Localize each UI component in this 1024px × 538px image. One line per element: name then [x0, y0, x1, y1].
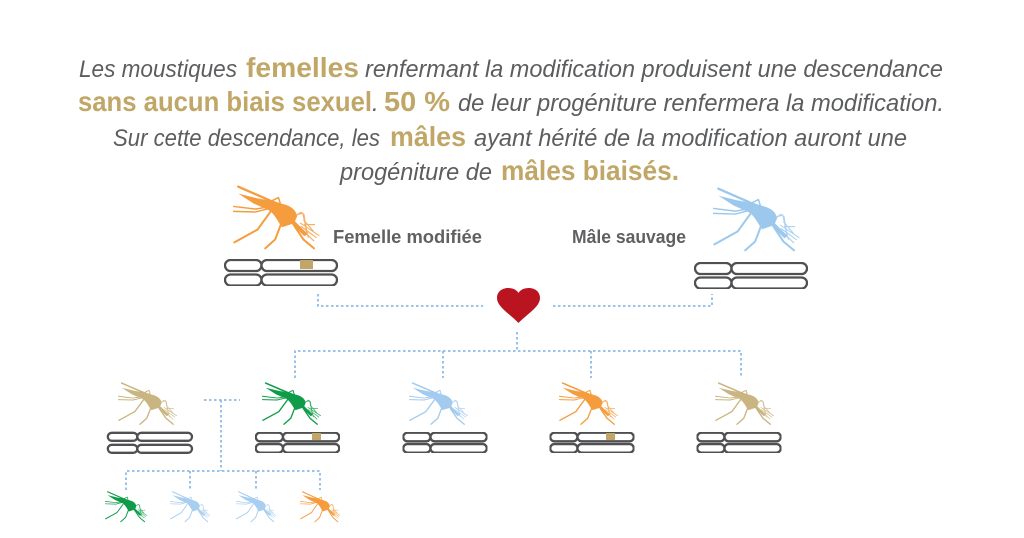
- second generation: green mosquito: [105, 492, 147, 522]
- label: modified female: Femelle modifiée: [333, 227, 482, 247]
- icon: heart: [497, 288, 540, 323]
- chromosomes: offspring 1: [108, 433, 192, 453]
- headline text: Les moustiques: [79, 56, 237, 83]
- headline text: [78, 52, 944, 186]
- headline text: sans aucun biais sexuel: [78, 86, 372, 117]
- second generation: orange mosquito: [300, 492, 340, 522]
- chromosomes: offspring 4: [550, 433, 634, 453]
- offspring 4: orange mosquito: [559, 383, 618, 424]
- offspring 5: tan mosquito: [715, 383, 774, 424]
- offspring 1: tan mosquito: [118, 383, 177, 424]
- offspring 2: green mosquito: [262, 383, 321, 424]
- connector: male to heart: [553, 294, 712, 306]
- headline text: femelles: [246, 52, 359, 83]
- headline text: ayant hérité de la modification auront une: [474, 125, 907, 152]
- second generation: blue mosquito: [170, 492, 210, 522]
- second generation: blue mosquito: [236, 492, 276, 522]
- headline text: .: [372, 90, 379, 117]
- chromosomes: offspring 3: [403, 433, 487, 453]
- offspring 3: blue mosquito: [409, 383, 468, 424]
- connector: second generation tree: [126, 400, 320, 490]
- headline text: mâles biaisés.: [501, 155, 679, 186]
- headline text: renfermant la modification produisent une descendance: [365, 56, 943, 83]
- chromosomes: modified female: [225, 260, 337, 286]
- headline text: Sur cette descendance, les: [113, 125, 380, 152]
- connector: offspring tree: [295, 332, 741, 378]
- headline text: de leur progéniture renfermera la modification.: [458, 90, 944, 117]
- chromosomes: offspring 2: [256, 433, 339, 453]
- label: wild male: Mâle sauvage: [572, 227, 686, 247]
- headline text: mâles: [390, 121, 466, 152]
- headline text: progéniture de: [339, 159, 492, 186]
- chromosomes: wild male: [695, 263, 807, 288]
- connector: female to heart: [318, 294, 483, 306]
- mosquito: modified female (orange): [234, 187, 319, 248]
- chromosomes: offspring 5: [697, 433, 781, 453]
- mosquito: wild male (blue): [714, 189, 799, 250]
- headline text: 50 %: [384, 86, 450, 117]
